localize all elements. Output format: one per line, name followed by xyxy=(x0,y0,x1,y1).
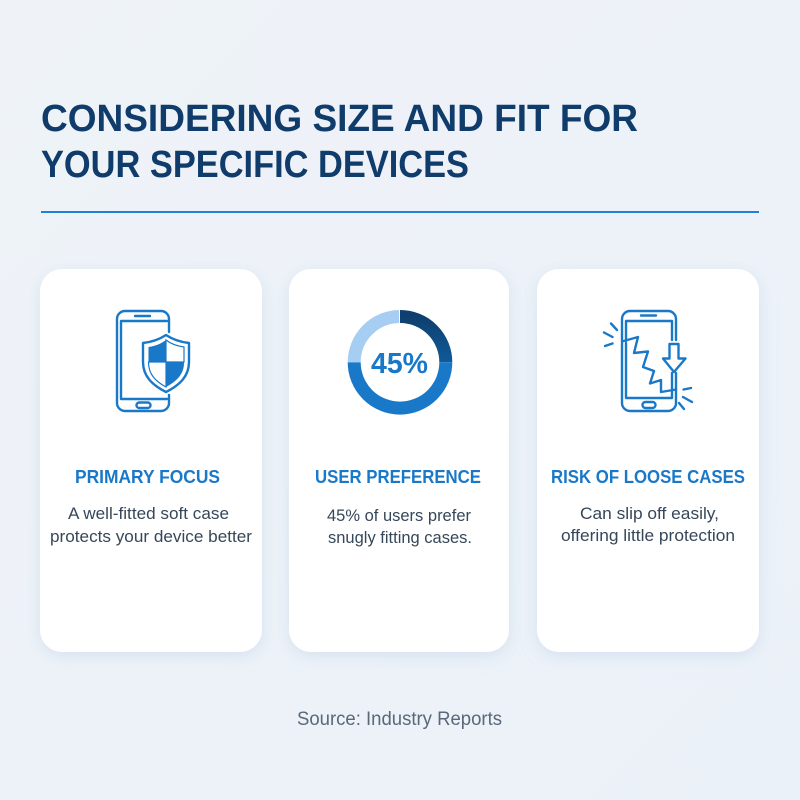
panel: user preference xyxy=(289,269,509,652)
text: user preference body: 45% of users prefer xyxy=(327,506,471,525)
text: primary focus body xyxy=(50,504,252,546)
heading: primary focus: PRIMARY FOCUS xyxy=(75,466,220,487)
heading: risk of loose cases: RISK OF LOOSE CASES xyxy=(551,466,745,487)
text: primary focus body: protects your device better xyxy=(50,527,252,546)
panel: risk of loose cases xyxy=(537,269,759,652)
title: CONSIDERING SIZE AND FIT FOR xyxy=(41,98,638,140)
title: YOUR SPECIFIC DEVICES xyxy=(41,144,469,186)
text: user preference body: snugly fitting cases. xyxy=(328,528,472,547)
panel: primary focus xyxy=(40,269,262,652)
heading: user preference: USER PREFERENCE xyxy=(315,466,481,487)
text: primary focus body: A well-fitted soft case xyxy=(68,504,229,523)
source note: Source: Industry Reports xyxy=(297,709,502,730)
text: risk body xyxy=(561,504,735,545)
text: risk body: offering little protection xyxy=(561,526,735,545)
text: risk body: Can slip off easily, xyxy=(580,504,719,523)
icon: cracked phone with arrow xyxy=(604,311,692,411)
title underline xyxy=(41,211,759,213)
donut chart: 45% xyxy=(354,316,446,408)
title xyxy=(41,98,638,186)
donut chart: 45%: 45% xyxy=(371,348,428,380)
icon: phone with shield xyxy=(117,311,189,411)
text: user preference body xyxy=(327,506,472,547)
